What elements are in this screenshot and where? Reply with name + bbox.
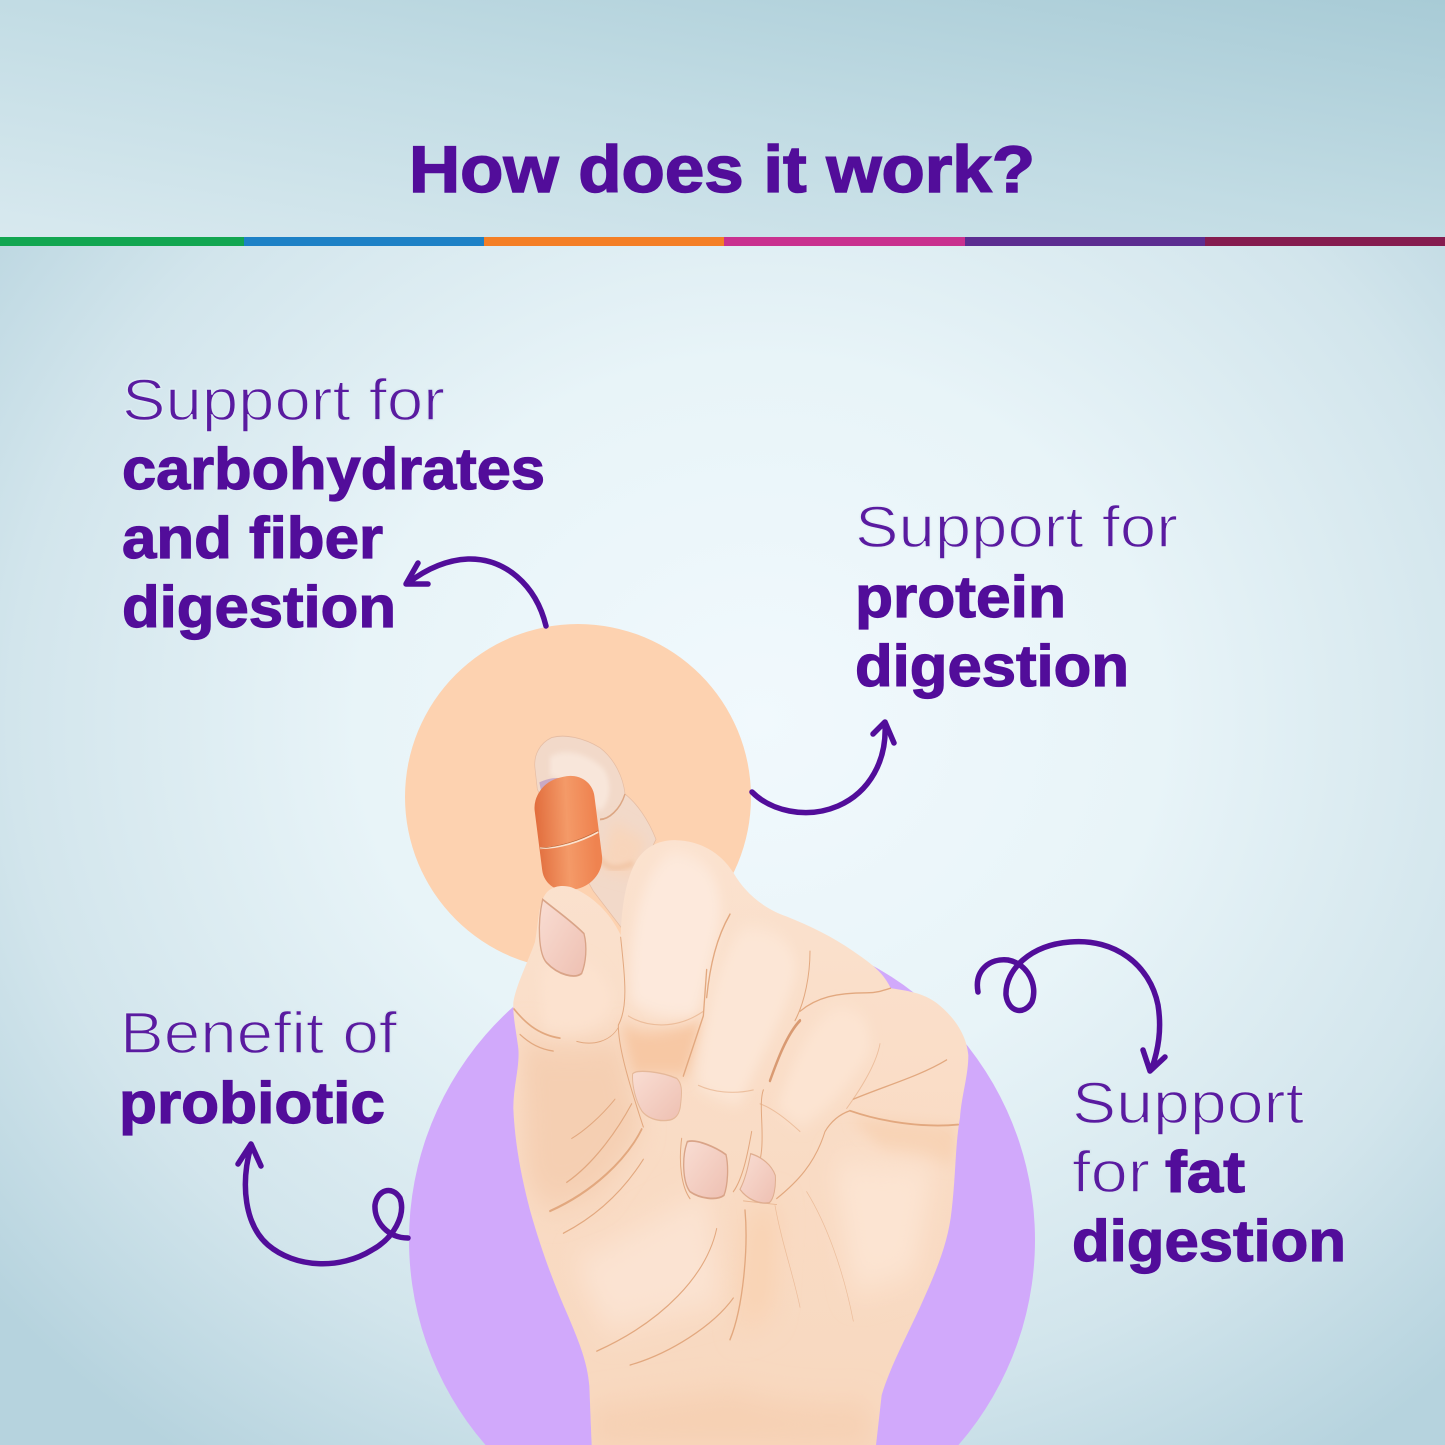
text: benefit of probiotic: Benefit of (120, 1001, 398, 1066)
text: carbohydrates and fiber digestion: and fiber (122, 506, 383, 571)
hand silhouette (513, 840, 968, 1445)
peach circle (405, 624, 751, 970)
text: fat digestion: fat (1165, 1140, 1245, 1205)
text: fat digestion: for (1072, 1140, 1150, 1205)
text: protein digestion: digestion (855, 634, 1129, 699)
text: carbohydrates and fiber digestion: Support for (122, 368, 445, 433)
nail: index (633, 1071, 681, 1121)
colour divider bar (0, 237, 1445, 246)
capsule (531, 770, 605, 897)
text: protein digestion (855, 495, 1178, 699)
text: fat digestion: Support (1072, 1071, 1304, 1136)
shading (520, 1034, 643, 1210)
arrow: loop to probiotic (238, 1144, 408, 1264)
text: fat digestion: digestion (1072, 1209, 1346, 1274)
arrow: peach circle to carbohydrates (406, 559, 546, 626)
nail: middle (684, 1141, 728, 1198)
text: benefit of probiotic: probiotic (119, 1071, 385, 1136)
creases (514, 914, 958, 1365)
title: How does it work? (409, 132, 1035, 206)
thumb nail (539, 899, 586, 976)
finger highlights (631, 852, 720, 1018)
arrow: peach circle to protein (752, 722, 894, 813)
purple circle (409, 927, 1035, 1445)
index fingertip behind capsule (535, 736, 656, 928)
text: fat digestion (1072, 1071, 1346, 1274)
arrow: loop to fat digestion (977, 942, 1165, 1071)
text: protein digestion: Support for (855, 495, 1178, 560)
text: carbohydrates and fiber digestion: carbohydrates (122, 437, 545, 502)
nail: ring (740, 1154, 775, 1203)
illustration: hand holding capsule (513, 736, 968, 1445)
header band (0, 0, 1445, 238)
text: benefit of probiotic (119, 1001, 398, 1136)
text: protein digestion: protein (855, 565, 1066, 630)
text: carbohydrates and fiber digestion: digestion (122, 575, 396, 640)
text: carbohydrates and fiber digestion (122, 368, 545, 640)
